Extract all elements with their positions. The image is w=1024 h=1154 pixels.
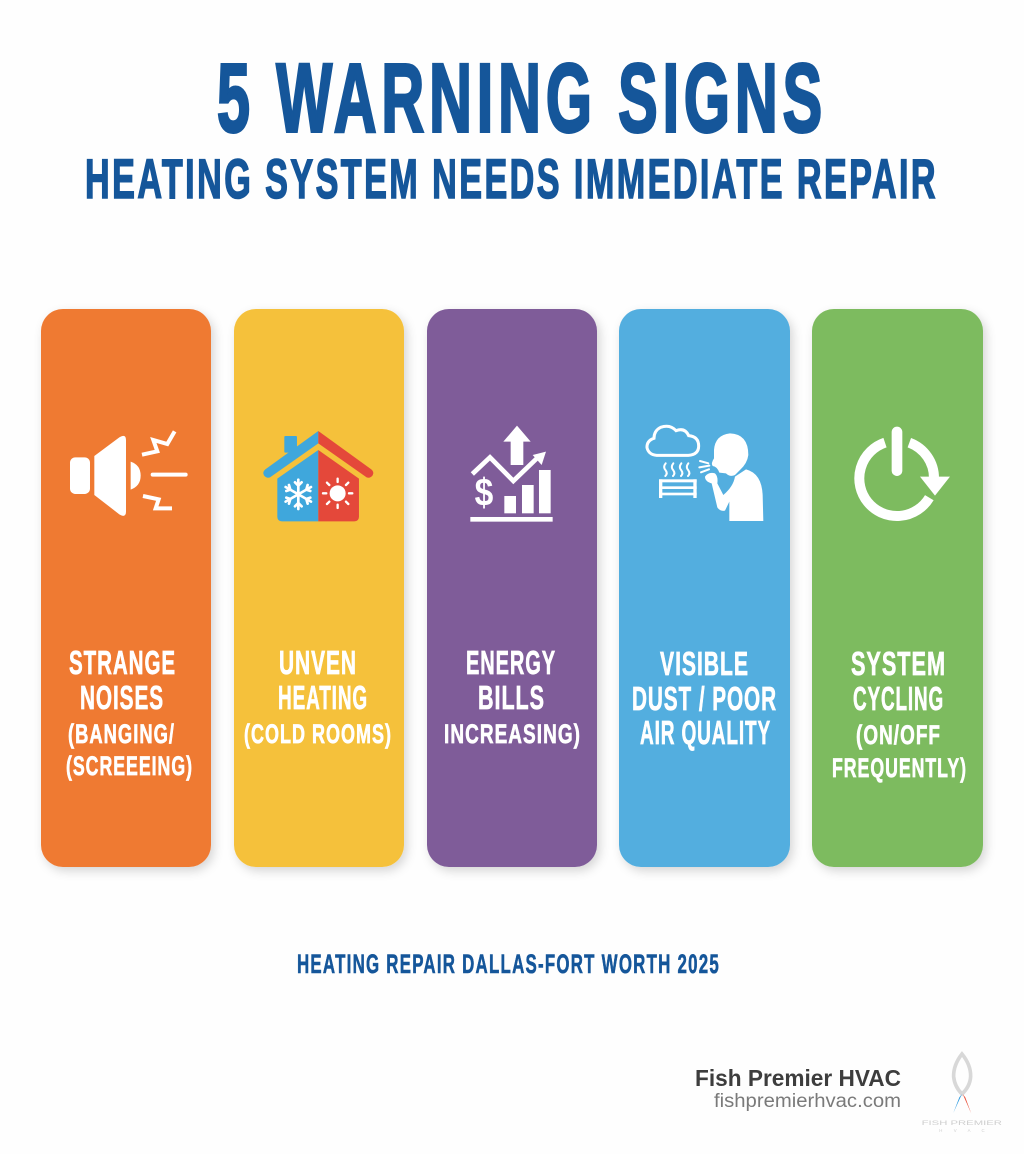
label: system cycling: (ON/OFF	[856, 720, 941, 750]
label: strange noises: NOISES	[80, 680, 164, 717]
label: uneven heating: UNVEN	[279, 645, 357, 682]
label: energy bills increasing	[444, 645, 581, 749]
logo: H V A C	[939, 1128, 985, 1133]
label: strange noises: STRANGE	[69, 645, 176, 682]
label: system cycling	[832, 646, 967, 783]
panel: dust and air quality	[619, 309, 790, 867]
label: strange noises	[66, 645, 193, 781]
label: strange noises: (SCREEEING)	[66, 751, 193, 781]
panel: energy bills	[427, 309, 597, 867]
label: system cycling: CYCLING	[853, 681, 944, 718]
label: system cycling: SYSTEM	[851, 646, 946, 683]
icon: speaker with noise lines	[70, 431, 186, 516]
brand website: fishpremierhvac.com	[714, 1091, 901, 1112]
label: uneven heating	[244, 645, 392, 749]
label: visible dust: VISIBLE	[660, 646, 749, 683]
label: energy bills increasing: ENERGY	[466, 645, 556, 682]
panel: uneven heating	[234, 309, 404, 867]
icon: rising bills chart: $	[475, 470, 493, 514]
label: strange noises: (BANGING/	[68, 719, 175, 749]
panel: strange noises	[41, 309, 211, 867]
brand name: Fish Premier HVAC	[695, 1065, 901, 1091]
icon: rising bills chart	[470, 426, 553, 522]
icon: power symbol with cycle arrow	[859, 427, 950, 516]
label: uneven heating: HEATING	[278, 680, 368, 717]
label: visible dust	[632, 646, 777, 752]
icon: house half cold half hot	[263, 431, 373, 521]
panel: system cycling	[812, 309, 983, 867]
label: uneven heating: (COLD ROOMS)	[244, 719, 392, 749]
logo	[922, 1054, 1003, 1133]
logo: FISH PREMIER	[922, 1120, 1003, 1127]
label: energy bills increasing: INCREASING)	[444, 719, 581, 749]
label: visible dust: AIR QUALITY	[640, 715, 771, 752]
footer caption: HEATING REPAIR DALLAS-FORT WORTH 2025	[297, 949, 720, 979]
label: energy bills increasing: BILLS	[478, 680, 545, 717]
label: visible dust: DUST / POOR	[632, 681, 777, 718]
icon: cloud, heater and coughing person	[647, 426, 763, 521]
